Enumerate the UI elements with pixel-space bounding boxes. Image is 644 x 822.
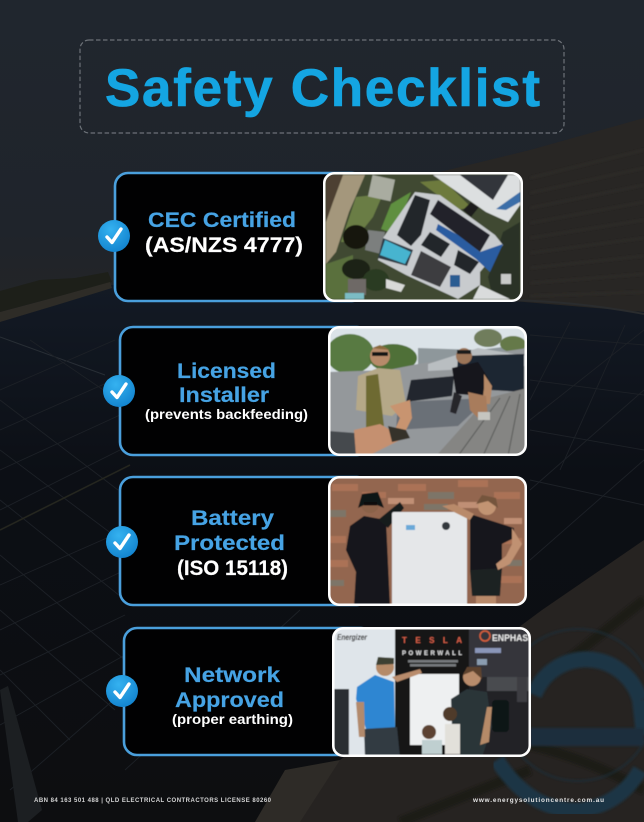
- photo: installers beside home battery: [328, 476, 527, 606]
- heading: Network Approved: Network: [184, 663, 280, 687]
- footer: ABN and licence: ABN 84 163 501 488 | QLD ELECTRICAL CONTRACTORS LICENSE 80260: [34, 798, 272, 804]
- heading: Battery Protected: Protected: [174, 531, 285, 555]
- heading: CEC Certified: CEC Certified: [148, 208, 296, 232]
- heading: Licensed Installer: [177, 359, 276, 407]
- watermark logo rings: [497, 629, 644, 810]
- photo: family and installer with Tesla Powerwall: POWERWALL: [402, 651, 462, 657]
- title: Safety Checklist: [105, 59, 540, 118]
- title box: [80, 40, 564, 133]
- heading: Network Approved: Approved: [175, 688, 284, 712]
- heading: Battery Protected: Battery: [191, 506, 274, 530]
- photo: family and installer with Tesla Powerwall: Energizer: [337, 633, 368, 642]
- card: Battery Protected: [106, 476, 527, 606]
- heading: Licensed Installer: Licensed: [177, 359, 276, 383]
- card: Licensed Installer: [103, 326, 527, 456]
- text: prevents backfeeding: (prevents backfeeding): [145, 407, 308, 422]
- card: Network Approved: [106, 627, 534, 757]
- panel: text background: [120, 327, 370, 455]
- text: ISO 15118: (ISO 15118): [177, 556, 288, 580]
- photo: family and installer with Tesla Powerwall: ENPHASE: [492, 633, 534, 643]
- icon: check badge: [103, 375, 135, 407]
- card: CEC Certified: [98, 172, 523, 302]
- icon: check badge: [98, 220, 130, 252]
- panel: text background: [120, 477, 370, 605]
- text: AS/NZS 4777: (AS/NZS 4777): [145, 233, 303, 257]
- heading: Network Approved: [175, 663, 284, 712]
- panel: text background: [124, 628, 374, 755]
- panel: text background: [115, 173, 365, 301]
- heading: Licensed Installer: Installer: [179, 383, 270, 407]
- photo: family and installer with Tesla Powerwall: TESLA: [402, 636, 462, 645]
- footer: website: www.energysolutioncentre.com.au: [472, 797, 604, 804]
- photo: family and installer with Tesla Powerwall: [332, 627, 534, 757]
- photo: aerial view of home with solar panels: [323, 172, 523, 302]
- icon: check badge: [106, 526, 138, 558]
- icon: check badge: [106, 675, 138, 707]
- text: proper earthing: (proper earthing): [172, 712, 293, 727]
- photo: two installers on a roof: [326, 326, 527, 456]
- heading: Battery Protected: [174, 506, 285, 555]
